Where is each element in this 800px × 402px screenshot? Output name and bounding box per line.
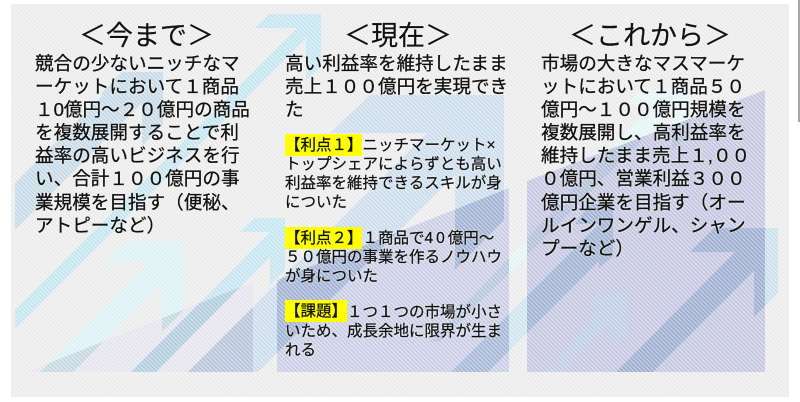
arrow: cyan second bbox=[130, 218, 285, 373]
arrow: pale right inside panel bbox=[545, 291, 628, 373]
text: past description: １0億円～２０億円の商品 bbox=[35, 99, 250, 120]
text: future description: 維持したまま売上１,００ bbox=[541, 145, 750, 166]
shape: middle rising panel bbox=[277, 188, 509, 373]
text: past description: い、合計１００億円の事 bbox=[35, 168, 240, 189]
text: future description bbox=[541, 53, 750, 259]
text: future description: ０億円、営業利益３００ bbox=[541, 168, 746, 189]
arrow: pale left bbox=[39, 241, 184, 373]
arrow: big blue bbox=[187, 95, 504, 373]
text: benefit 2 bbox=[285, 230, 502, 285]
text: benefit 1 bbox=[285, 138, 502, 211]
text: future description: ットにおいて１商品５０ bbox=[541, 76, 745, 97]
text: future description: 市場の大きなマスマーケ bbox=[541, 53, 745, 74]
label: issue: 【課題】 bbox=[285, 303, 347, 320]
text: present summary bbox=[285, 53, 508, 120]
text: future description: 億円～１００億円規模を bbox=[541, 99, 746, 120]
arrow: cyan third bbox=[450, 204, 613, 373]
text: past description: 益率の高いビジネスを行 bbox=[35, 145, 240, 166]
text: benefit 1: についた bbox=[285, 194, 347, 211]
text: benefit 1: トップシェアによらずとも高い bbox=[285, 156, 502, 173]
text: present summary: 高い利益率を維持したまま bbox=[285, 53, 508, 74]
text: future description: ルインワンゲル、シャン bbox=[541, 215, 746, 236]
text: future description: 億円企業を目指す（オー bbox=[541, 192, 746, 213]
label: benefit 1: 【利点１】 bbox=[285, 137, 363, 154]
text: past description: 業規模を目指す（便秘、 bbox=[35, 192, 240, 213]
text: benefit 1: 利益率を維持できるスキルが身 bbox=[285, 175, 502, 192]
heading: future: ＜これから＞ bbox=[569, 21, 731, 51]
text: benefit 2: が身についた bbox=[285, 268, 378, 285]
arrow: cyan long bbox=[15, 14, 321, 329]
text: present summary: た bbox=[285, 99, 304, 120]
text: future description: プーなど） bbox=[541, 238, 634, 259]
text: past description: を複数展開することで利 bbox=[35, 122, 239, 143]
text: past description: 競合の少ないニッチなマ bbox=[35, 53, 240, 74]
arrow: grey-blue left bbox=[15, 72, 163, 230]
text: present summary: 売上１００億円を実現でき bbox=[285, 76, 508, 97]
heading: past: ＜今まで＞ bbox=[79, 21, 214, 51]
text: issue: いため、成長余地に限界が生ま bbox=[285, 323, 502, 340]
text: benefit 2: ５０億円の事業を作るノウハウ bbox=[285, 249, 502, 266]
text: past description: アトピーなど） bbox=[35, 215, 165, 236]
shape: right rising panel bbox=[527, 90, 765, 373]
text: issue bbox=[285, 304, 502, 359]
label: benefit 2: 【利点２】 bbox=[285, 230, 363, 247]
text: past description: ーケットにおいて１商品 bbox=[35, 76, 239, 97]
text: issue: れる bbox=[285, 342, 316, 359]
text: future description: 複数展開し、高利益率を bbox=[541, 122, 746, 143]
heading: present: ＜現在＞ bbox=[344, 21, 452, 51]
shape: left rising triangle bbox=[40, 288, 253, 372]
text: past description bbox=[35, 53, 250, 236]
arrow: blue right bbox=[615, 228, 778, 373]
arrow: pale centre bbox=[430, 90, 690, 342]
